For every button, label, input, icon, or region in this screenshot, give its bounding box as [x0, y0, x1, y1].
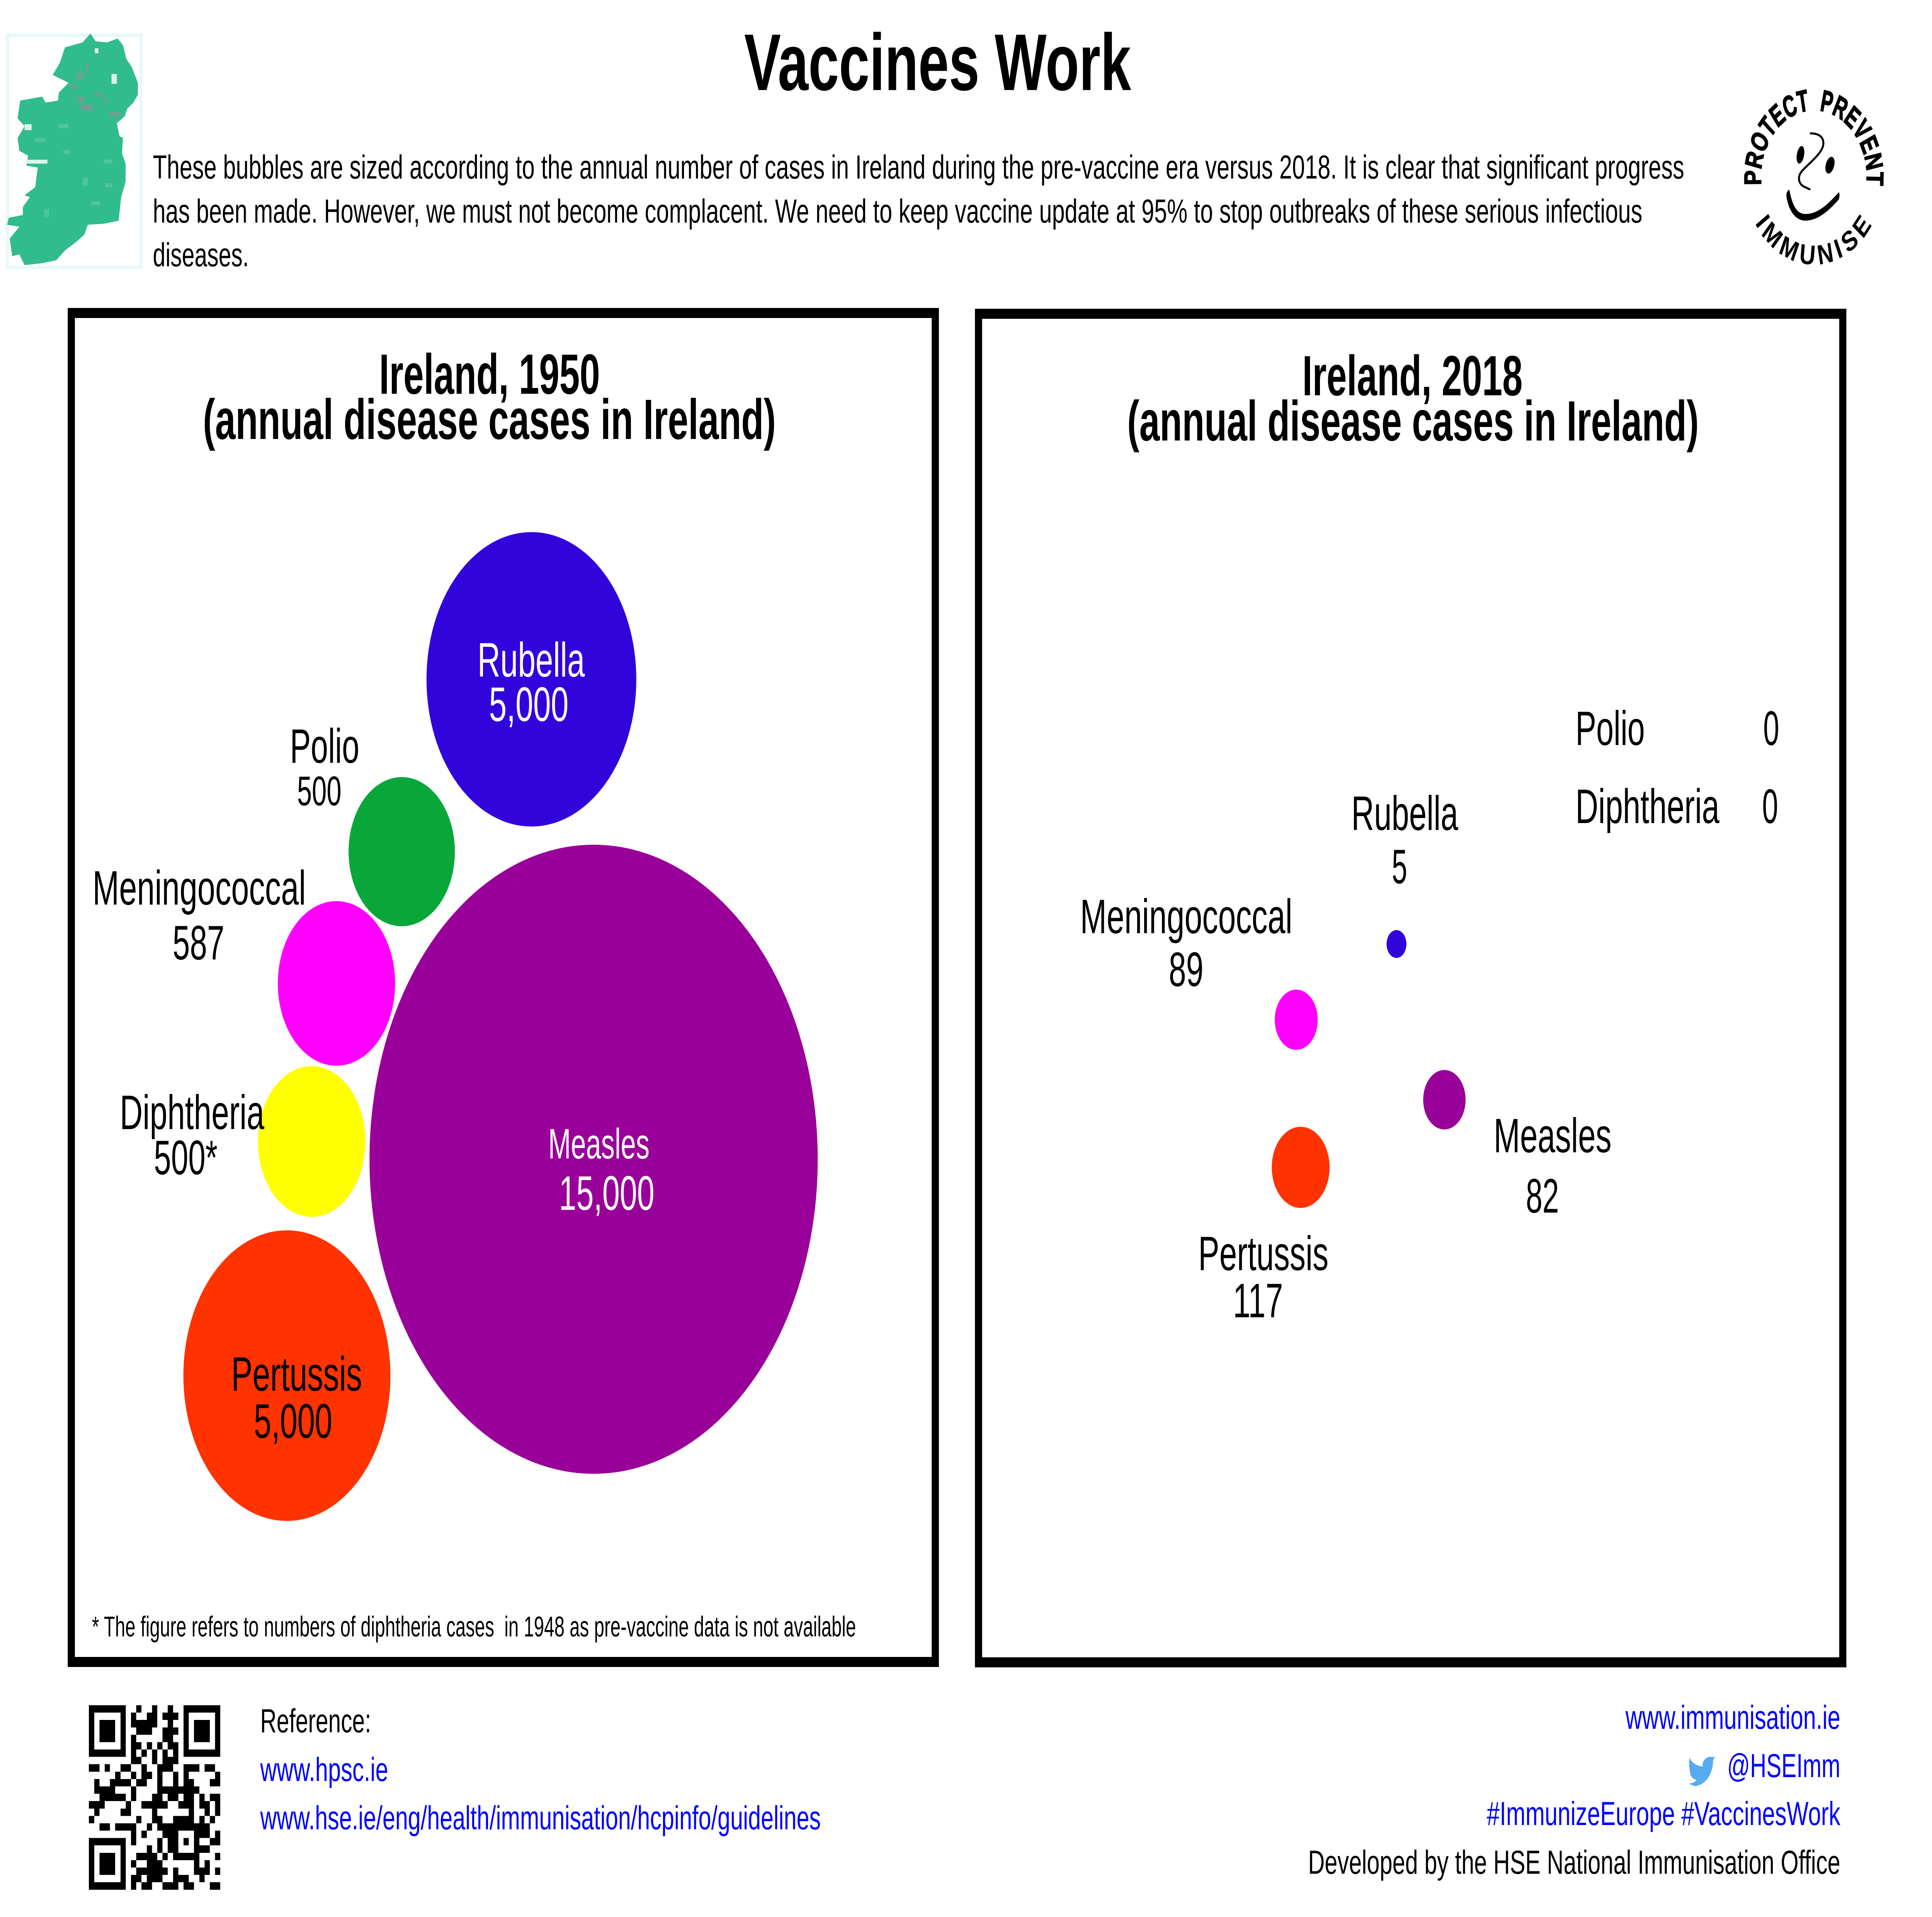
bubble: Meningococcal 89: 89	[1169, 942, 1204, 996]
label: Polio 0	[1575, 701, 1779, 755]
contact details: #ImmunizeEurope #VaccinesWork	[1487, 1795, 1840, 1832]
bubble: Measles 82	[1423, 1070, 1612, 1223]
bubble: Pertussis 117	[1198, 1127, 1330, 1327]
icon: Protect Prevent Immunise smiley logo	[1739, 83, 1889, 271]
label: Diphtheria 0: Diphtheria	[1575, 779, 1719, 833]
bubble: Meningococcal 587: Meningococcal	[92, 861, 306, 915]
references: www.hse.ie/eng/health/immunisation/hcpinfo/guidelines	[260, 1799, 821, 1836]
heading: Ireland 1950	[203, 343, 776, 451]
heading: Ireland 2018: Ireland, 2018	[1302, 344, 1522, 408]
icon: Protect Prevent Immunise smiley logo: PROTECT PREVENT	[1739, 83, 1889, 186]
heading: Ireland 2018	[1127, 344, 1699, 453]
intro text	[153, 148, 1684, 273]
panel: Ireland 1950	[71, 313, 935, 1662]
bubble: Rubella 5: 5	[1392, 840, 1407, 893]
icon: Protect Prevent Immunise smiley logo: IMMUNISE	[1751, 209, 1876, 271]
contact details: Developed by the HSE National Immunisation Office	[1308, 1844, 1840, 1881]
bubble: Pertussis 5,000: Pertussis	[231, 1347, 362, 1401]
bubble: Pertussis 5,000: 5,000	[254, 1394, 332, 1448]
heading: Ireland 1950: (annual disease cases in Ireland)	[203, 388, 776, 451]
intro text: has been made. However, we must not become complacent. We need to keep vaccine update at 95% to stop outbreaks of these serious infectious	[153, 192, 1642, 230]
bubble: Meningococcal 89: Meningococcal	[1080, 890, 1293, 943]
bubble: Diphtheria 500*: 500*	[154, 1131, 218, 1184]
bubble: Measles 15,000: Measles	[548, 1121, 650, 1168]
bubble: Diphtheria 500*	[120, 1066, 366, 1217]
references: Reference:	[260, 1702, 371, 1739]
icon: twitter bird	[1689, 1757, 1715, 1786]
panel: Ireland 2018	[978, 314, 1843, 1662]
bubble: Pertussis 5,000	[184, 1230, 390, 1521]
bubble: Meningococcal 587	[92, 861, 395, 1066]
bubble: Rubella 5	[1351, 786, 1458, 958]
intro text: diseases.	[153, 236, 249, 273]
contact details	[1308, 1699, 1840, 1881]
bubble: Rubella 5,000	[427, 532, 636, 827]
heading: Ireland 2018: (annual disease cases in Ireland)	[1127, 390, 1699, 453]
bubble: Measles 82: Measles	[1494, 1109, 1612, 1162]
label: Polio 0: 0	[1763, 701, 1779, 755]
references: www.hpsc.ie	[260, 1751, 388, 1788]
bubble: Rubella 5,000: 5,000	[489, 677, 568, 731]
label: Diphtheria 0: 0	[1762, 779, 1778, 833]
bubble: Meningococcal 89	[1080, 890, 1318, 1050]
bubble: Measles 15,000	[369, 845, 818, 1474]
QR code	[89, 1705, 220, 1890]
bubble: Rubella 5: Rubella	[1351, 786, 1458, 840]
bubble: Measles 82: 82	[1526, 1169, 1559, 1223]
footnote: * The figure refers to numbers of diphtheria cases in 1948 as pre-vaccine data is not available	[92, 1611, 856, 1643]
bubble: Rubella 5,000: Rubella	[478, 633, 585, 687]
contact details: www.immunisation.ie	[1625, 1699, 1840, 1736]
bubble: Polio 500	[290, 719, 455, 926]
bubble: Meningococcal 587: 587	[173, 916, 224, 970]
bubble: Pertussis 117: Pertussis	[1198, 1226, 1328, 1280]
intro text: These bubbles are sized according to the annual number of cases in Ireland during the pre-vaccine era versus 2018. It is clear that significant progress	[153, 148, 1684, 185]
bubble: Pertussis 117: 117	[1233, 1274, 1283, 1327]
bubble: Measles 15,000: 15,000	[559, 1166, 655, 1220]
contact details: @HSEImm	[1727, 1747, 1840, 1784]
references	[260, 1702, 821, 1836]
bubble: Diphtheria 500*: Diphtheria	[120, 1085, 265, 1139]
heading: Ireland 1950: Ireland, 1950	[379, 343, 600, 406]
bubble: Polio 500: 500	[297, 767, 342, 814]
label: Polio 0: Polio	[1575, 701, 1645, 755]
bubble: Polio 500: Polio	[290, 719, 359, 773]
icon: map of Ireland	[7, 34, 141, 267]
title: Vaccines Work	[744, 18, 1131, 107]
